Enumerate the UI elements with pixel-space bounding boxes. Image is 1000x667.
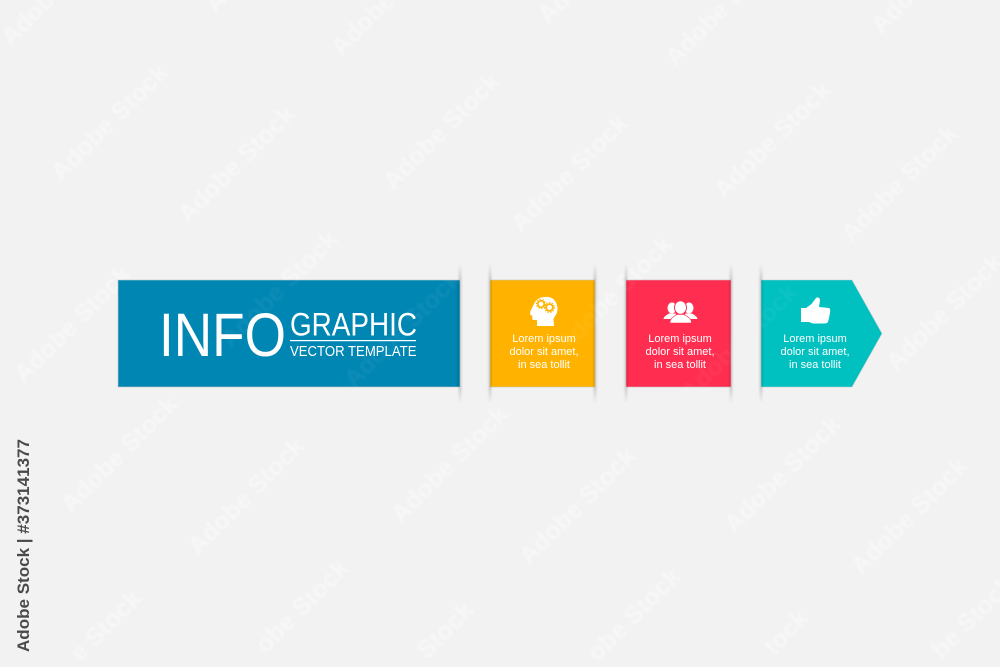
- watermark pattern: Stock: [411, 596, 479, 664]
- icon: thumbs up: [801, 297, 830, 324]
- text: yellow step: Lorem ipsum: [512, 333, 576, 345]
- panel: teal arrow step: [761, 280, 882, 387]
- watermark pattern: tock: [758, 604, 814, 661]
- watermark over panels: Adobe Stock: [675, 278, 803, 406]
- panel: title banner: [118, 280, 460, 387]
- watermark over panels: Adobe Stock: [215, 225, 343, 353]
- subheading: vector template: VECTOR TEMPLATE: [290, 344, 417, 360]
- watermark pattern: Adobe Stock: [8, 260, 136, 388]
- heading: GRAPHIC: GRAPHIC: [290, 306, 417, 342]
- watermark over panels: Adobe Stock: [550, 230, 678, 358]
- text: red step: Lorem ipsum: [648, 333, 712, 345]
- watermark pattern: Adobe Stock: [172, 100, 300, 228]
- watermark pattern: Adobe Stock: [45, 58, 173, 186]
- watermark pattern: Adobe Stock: [550, 230, 678, 358]
- icon: head with gears: [530, 297, 558, 326]
- watermark pattern: Adobe Stock: [835, 119, 963, 247]
- text: teal step: dolor sit amet,: [780, 346, 850, 358]
- icon: group of people: [664, 301, 698, 323]
- watermark pattern: obe Stock: [250, 554, 354, 659]
- text: teal step: in sea tollit: [789, 359, 841, 371]
- panel edge shadows: [457, 280, 763, 387]
- text: red step: dolor sit amet,: [645, 346, 715, 358]
- watermark pattern: Adobe Stock: [708, 76, 836, 204]
- stock id label: Adobe Stock | #373141377: [14, 439, 33, 652]
- watermark pattern: Adobe Stock: [55, 390, 183, 518]
- watermark over panels: [215, 225, 803, 406]
- watermark pattern: Adobe Stock: [215, 225, 343, 353]
- watermark pattern: Adobe Stock: [845, 452, 973, 580]
- watermark over panels: Adobe Stock: [338, 265, 466, 393]
- text: teal step: Lorem ipsum: [783, 333, 847, 345]
- panel: yellow step: [490, 280, 595, 387]
- watermark pattern: Adobe Stock: [718, 410, 846, 538]
- watermark pattern: Adobe Stock: [505, 109, 633, 237]
- slit shadows: [459, 264, 762, 403]
- watermark pattern: obe Stock: [582, 562, 686, 667]
- watermark pattern: Adobe Stock: [385, 400, 513, 528]
- text: yellow step: dolor sit amet,: [509, 346, 579, 358]
- watermark pattern: Adobe Stock: [513, 442, 641, 570]
- watermark pattern: e Stock: [65, 584, 147, 667]
- watermark pattern: Adobe Stock: [182, 432, 310, 560]
- title underline: [290, 340, 416, 341]
- panel: red step: [626, 280, 731, 387]
- watermark pattern: Adobe Stock: [377, 67, 505, 195]
- text: red step: in sea tollit: [654, 359, 706, 371]
- text: yellow step: in sea tollit: [518, 359, 570, 371]
- title: INFO: INFO: [159, 301, 286, 369]
